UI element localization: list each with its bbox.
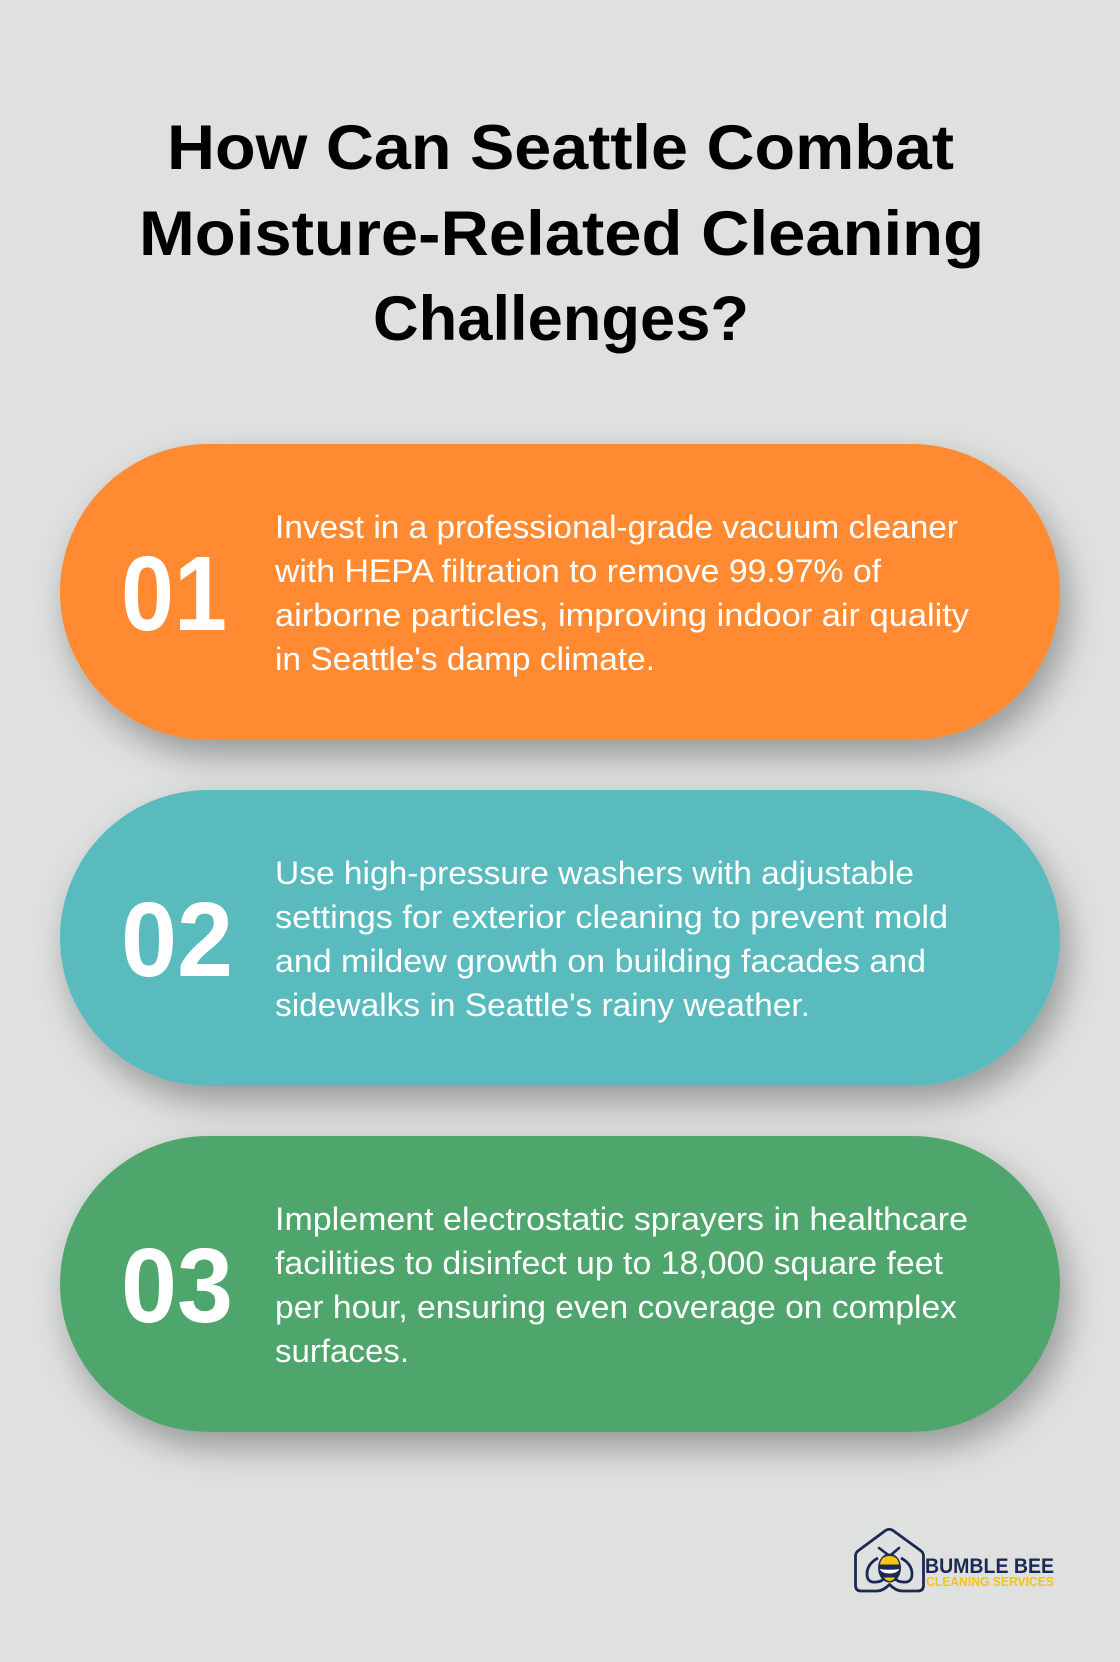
title: How Can Seattle Combat xyxy=(167,113,954,183)
icon: bee in house xyxy=(856,1529,924,1591)
text block: step 01: with HEPA filtration to remove 99.97% of xyxy=(274,553,882,589)
number 01: 01 xyxy=(121,535,227,653)
text block: step 02: and mildew growth on building facades and xyxy=(275,943,926,979)
panel: step 02 xyxy=(60,790,1060,1086)
pill background: orange xyxy=(60,444,1060,740)
text block: step 03: facilities to disinfect up to 18,000 square feet xyxy=(275,1245,943,1281)
text block: step 03: per hour, ensuring even coverage on complex xyxy=(275,1289,957,1325)
brand name: BUMBLE BEE xyxy=(925,1555,1054,1578)
title: Challenges? xyxy=(373,284,749,354)
text block: step 01: in Seattle's damp climate. xyxy=(275,641,655,677)
text block: step 03: Implement electrostatic sprayers in healthcare xyxy=(275,1201,968,1237)
title xyxy=(139,113,984,354)
number 02: 02 xyxy=(121,881,233,999)
number 03: 03 xyxy=(121,1227,233,1345)
logo: Bumble Bee Cleaning Services xyxy=(856,1529,1054,1591)
text block: step 02 xyxy=(275,855,948,1023)
panel: step 03 xyxy=(60,1136,1060,1432)
pill background: green xyxy=(60,1136,1060,1432)
panel: step 01 xyxy=(60,444,1060,740)
text block: step 02: sidewalks in Seattle's rainy weather. xyxy=(275,987,810,1023)
text block: step 02: settings for exterior cleaning to prevent mold xyxy=(275,899,948,935)
text block: step 02: Use high-pressure washers with adjustable xyxy=(275,855,914,891)
text block: step 03: surfaces. xyxy=(275,1333,409,1369)
text block: step 03 xyxy=(275,1201,968,1369)
title: Moisture-Related Cleaning xyxy=(139,199,984,269)
text block: step 01: Invest in a professional-grade vacuum cleaner xyxy=(275,509,958,545)
brand tagline: CLEANING SERVICES xyxy=(926,1575,1054,1589)
text block: step 01: airborne particles, improving indoor air quality xyxy=(275,597,970,633)
text block: step 01 xyxy=(274,509,970,677)
pill background: teal xyxy=(60,790,1060,1086)
